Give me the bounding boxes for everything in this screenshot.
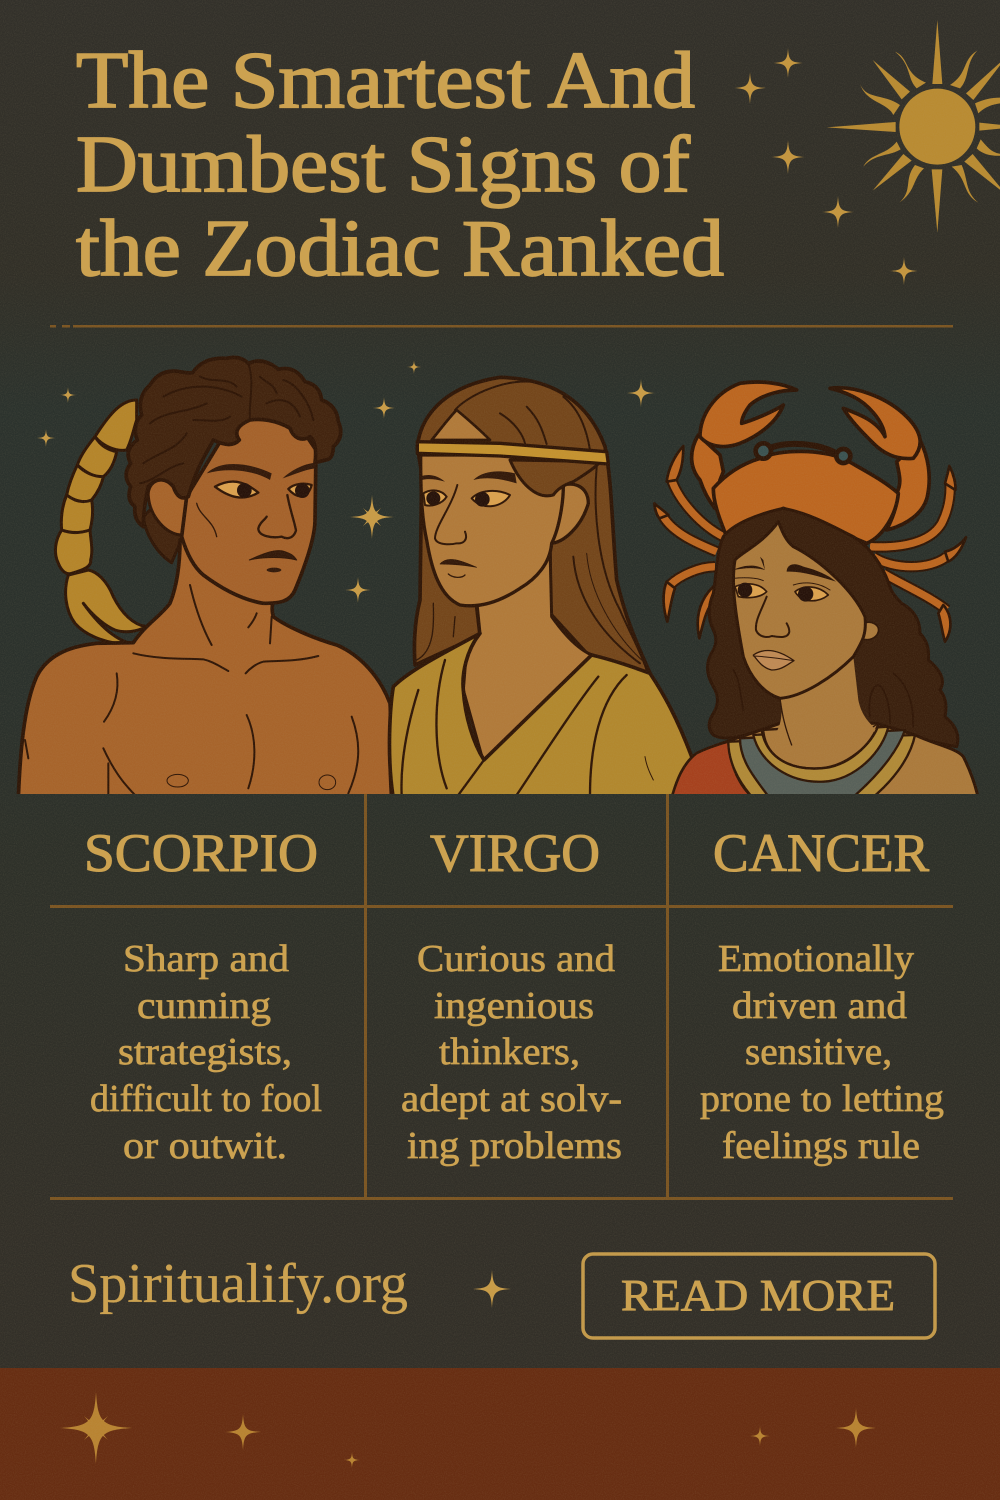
forehead patch	[432, 410, 490, 440]
title divider	[50, 325, 953, 328]
crab carapace	[713, 451, 898, 543]
icon: star beside website	[473, 1270, 511, 1308]
text: Cancer description: driven and	[732, 985, 907, 1027]
text: Scorpio description: difficult to fool	[90, 1078, 322, 1120]
title	[76, 37, 724, 293]
long hair	[414, 377, 650, 673]
icon: sun	[827, 20, 1000, 233]
website name: Spiritualify.org	[68, 1253, 408, 1315]
hair strands	[733, 670, 913, 727]
text: Virgo description: thinkers,	[439, 1031, 580, 1073]
footer stars	[60, 1392, 876, 1468]
title: Dumbest Signs of	[76, 121, 690, 209]
back hair below ear	[144, 508, 180, 564]
neck and chest	[463, 547, 592, 762]
red garment	[672, 742, 753, 798]
read more button: READ MORE	[621, 1271, 895, 1320]
sign names: CANCER	[713, 823, 929, 883]
neck lines	[763, 698, 878, 769]
robe fold lines	[401, 660, 653, 795]
crab legs	[654, 446, 966, 642]
crab arms	[692, 435, 929, 530]
footer band	[0, 1368, 1000, 1500]
figure: Virgo woman	[389, 377, 698, 798]
robe	[389, 633, 698, 798]
text: Cancer description: prone to letting	[700, 1078, 944, 1120]
text: Cancer description	[700, 938, 944, 1167]
crab claws	[700, 382, 920, 459]
text: Scorpio description: or outwit.	[123, 1125, 287, 1167]
hair strands	[455, 382, 647, 670]
ear	[547, 484, 588, 543]
text: Cancer description: Emotionally	[718, 938, 914, 980]
text: Cancer description: feelings rule	[722, 1125, 920, 1167]
figure: Scorpio man with scorpion tail	[18, 357, 392, 798]
eyes	[215, 482, 312, 498]
table grid lines	[50, 794, 953, 1200]
facial features	[733, 557, 836, 670]
title: The Smartest And	[76, 37, 695, 125]
torso contour lines	[25, 585, 358, 795]
headband	[417, 442, 608, 464]
figure: Cancer woman with crab	[654, 382, 978, 798]
text: Scorpio description	[90, 938, 322, 1167]
text: Virgo description: ing problems	[407, 1125, 622, 1167]
collar bands	[728, 723, 915, 798]
face	[421, 455, 563, 606]
text: Scorpio description: Sharp and	[123, 938, 289, 980]
title: the Zodiac Ranked	[76, 205, 724, 293]
face	[182, 417, 316, 603]
text: Scorpio description: cunning	[137, 985, 271, 1027]
torso	[18, 540, 392, 798]
scorpion tail	[55, 400, 147, 644]
facial features	[417, 471, 517, 660]
neck	[777, 657, 878, 732]
ear	[862, 622, 879, 640]
eyebrows	[207, 463, 316, 480]
text: Virgo description: adept at solv-	[401, 1078, 622, 1120]
wavy dark hair	[707, 508, 958, 747]
text: Virgo description	[401, 938, 622, 1167]
text: Virgo description: ingenious	[434, 985, 594, 1027]
shoulders	[672, 723, 978, 798]
face	[733, 522, 865, 698]
stars around figures	[37, 360, 655, 603]
text: Virgo description: Curious and	[417, 938, 615, 980]
crab eyes	[756, 443, 850, 463]
nose and mouth	[197, 495, 297, 572]
read more button	[583, 1254, 935, 1338]
sign names: VIRGO	[430, 823, 600, 883]
sign names	[84, 823, 929, 883]
ear	[148, 479, 187, 535]
decorative stars near title	[734, 48, 918, 285]
text: Cancer description: sensitive,	[745, 1031, 892, 1073]
hair strands	[140, 363, 313, 483]
text: Scorpio description: strategists,	[118, 1031, 292, 1073]
side hair fringe	[510, 460, 600, 496]
sign names: SCORPIO	[84, 823, 318, 883]
hair	[126, 357, 341, 527]
figures illustration	[18, 357, 978, 798]
